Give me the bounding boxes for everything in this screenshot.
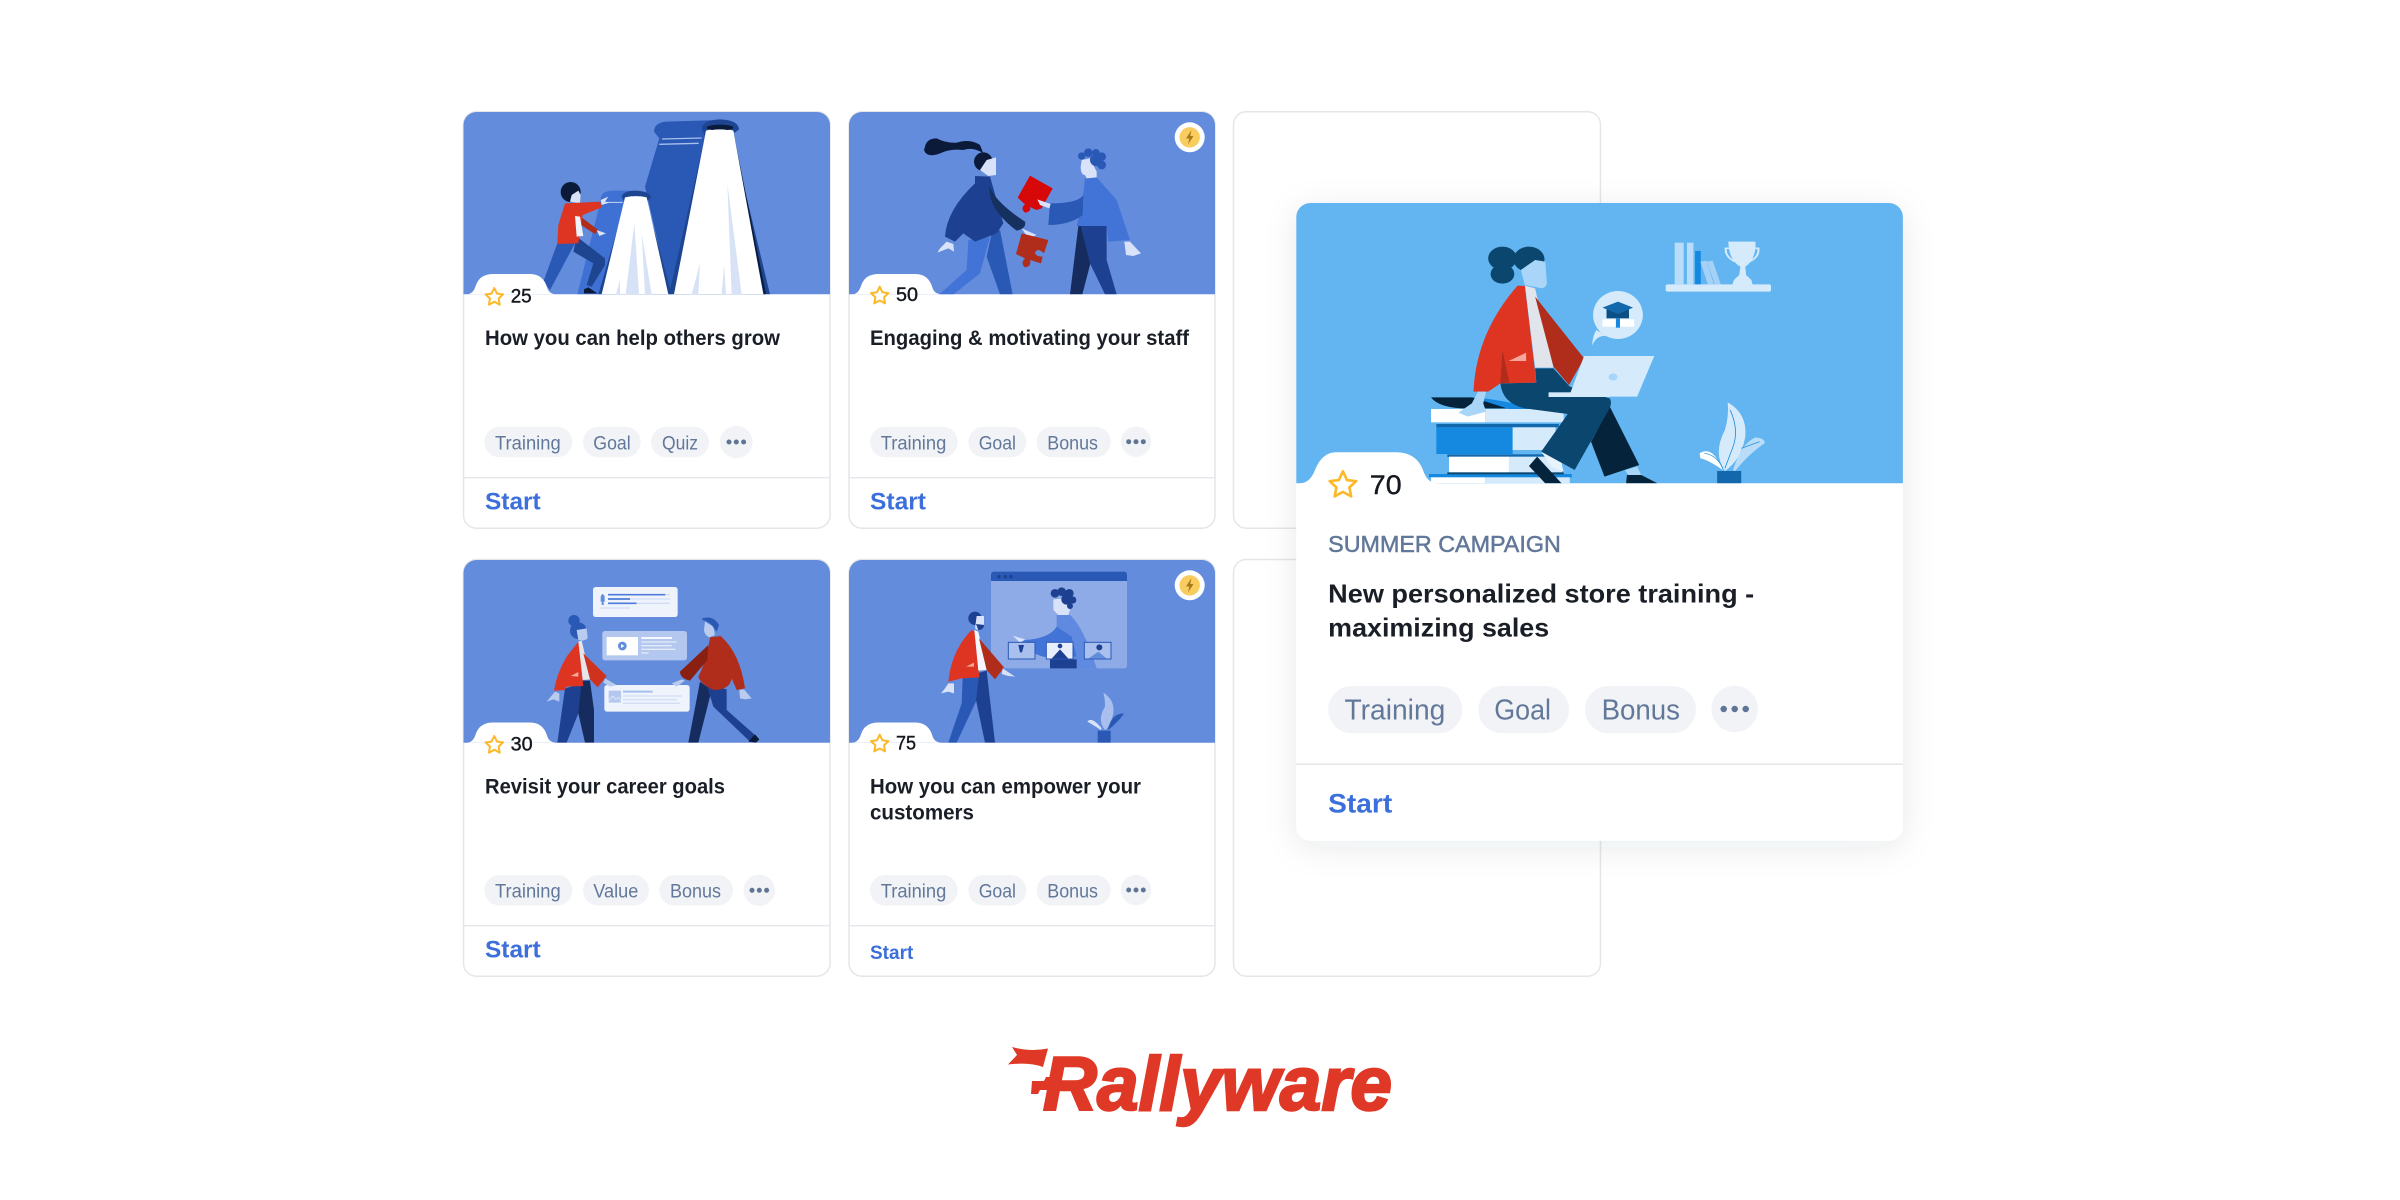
tags [1328,686,1758,733]
card: How you can empower your customers [848,559,1216,976]
tags: Goal [1494,694,1551,726]
tags: Goal [979,433,1016,454]
tags: Training [495,433,561,454]
card: How you can help others grow [463,111,831,528]
star badge: 75: 75 [896,734,916,754]
tags [870,875,1151,906]
campaign label: SUMMER CAMPAIGN [1328,531,1561,557]
star badge: 25 [467,274,557,307]
tags: Bonus [1047,882,1098,903]
tags: Training [1344,694,1445,726]
tags [870,426,1151,457]
start link: Start [870,943,914,964]
empty card bottom right [1234,560,1600,976]
card: Engaging & motivating your staff [848,111,1216,528]
star badge: 50: 50 [896,285,918,306]
card title: Revisit your career goals [485,775,725,798]
start link: Start [485,937,541,964]
start link: Start [870,488,926,515]
card title: How you can empower your [870,775,1141,798]
star badge: 30: 30 [511,734,533,756]
star badge: 75 [852,722,942,754]
star badge: 70 [1300,452,1438,500]
icon: flag [1008,1047,1058,1094]
illustration: two people with puzzle pieces [848,111,1216,295]
star badge: 30 [467,722,557,756]
card: Revisit your career goals [463,559,831,976]
illustration: two people with content cards [463,559,831,743]
tags: Goal [593,433,631,454]
tags: Training [881,882,946,903]
featured title: New personalized store training - [1328,579,1754,609]
start link: Start [1328,789,1392,819]
featured title [1328,579,1754,643]
tags: Value [593,882,638,903]
card title: customers [870,801,974,824]
bonus lightning badge [1175,570,1205,600]
tags [484,875,775,906]
star badge: 70: 70 [1370,470,1402,500]
tags: Bonus [670,882,721,903]
bonus lightning badge [1175,122,1205,152]
tags: Bonus [1047,433,1098,454]
start link: Start [485,488,541,515]
tags: Training [495,882,561,903]
card title [870,775,1141,824]
illustration: climbing the books [463,111,831,295]
illustration: video call [848,559,1216,743]
logo: Rallyware: Rallyware [1043,1042,1392,1127]
empty card top right [1234,112,1600,528]
featured card: New personalized store training [1296,203,1904,841]
tags: Training [881,433,946,454]
tags [484,426,753,458]
illustration: woman with laptop on books [1296,203,1904,484]
star badge: 25: 25 [511,286,532,307]
card title: Engaging & motivating your staff [870,327,1190,350]
card title: How you can help others grow [485,327,781,350]
featured title: maximizing sales [1328,613,1549,643]
star badge: 50 [852,274,942,306]
tags: Quiz [662,433,698,454]
tags: Goal [979,882,1016,903]
tags: Bonus [1602,694,1680,726]
